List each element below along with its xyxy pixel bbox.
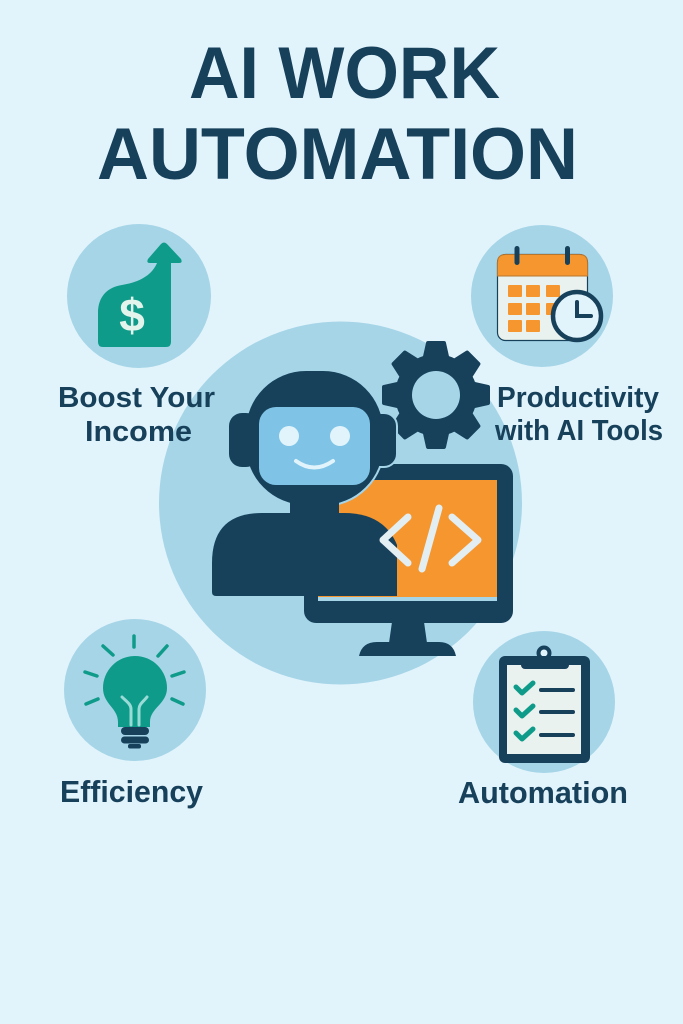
central circle — [159, 322, 522, 684]
icon: clipboard checklist — [499, 648, 590, 763]
panel: efficiency — [60, 619, 206, 809]
icon: robot — [212, 371, 397, 596]
panel: productivity with AI tools — [471, 225, 663, 447]
panel: boost your income: Income — [85, 416, 192, 448]
icon: gear — [384, 343, 488, 447]
icon: code symbol — [383, 508, 478, 569]
panel: automation: Automation — [458, 775, 628, 810]
title: AI WORK — [189, 33, 500, 114]
icon: light bulb — [85, 636, 184, 748]
icon: calendar and clock — [498, 246, 601, 340]
icon: money arrow — [98, 242, 182, 347]
title: AUTOMATION — [97, 114, 578, 195]
panel: productivity with AI tools: with AI Tools — [494, 415, 663, 447]
panel: boost your income: Boost Your — [58, 382, 215, 414]
title — [97, 33, 578, 195]
icon: computer monitor — [304, 464, 513, 656]
icon: money arrow: $ — [119, 289, 145, 341]
panel: productivity with AI tools: Productivity — [497, 382, 659, 414]
panel: efficiency: Efficiency — [60, 774, 204, 809]
panel: boost your income — [58, 224, 215, 448]
panel: automation — [458, 631, 628, 810]
